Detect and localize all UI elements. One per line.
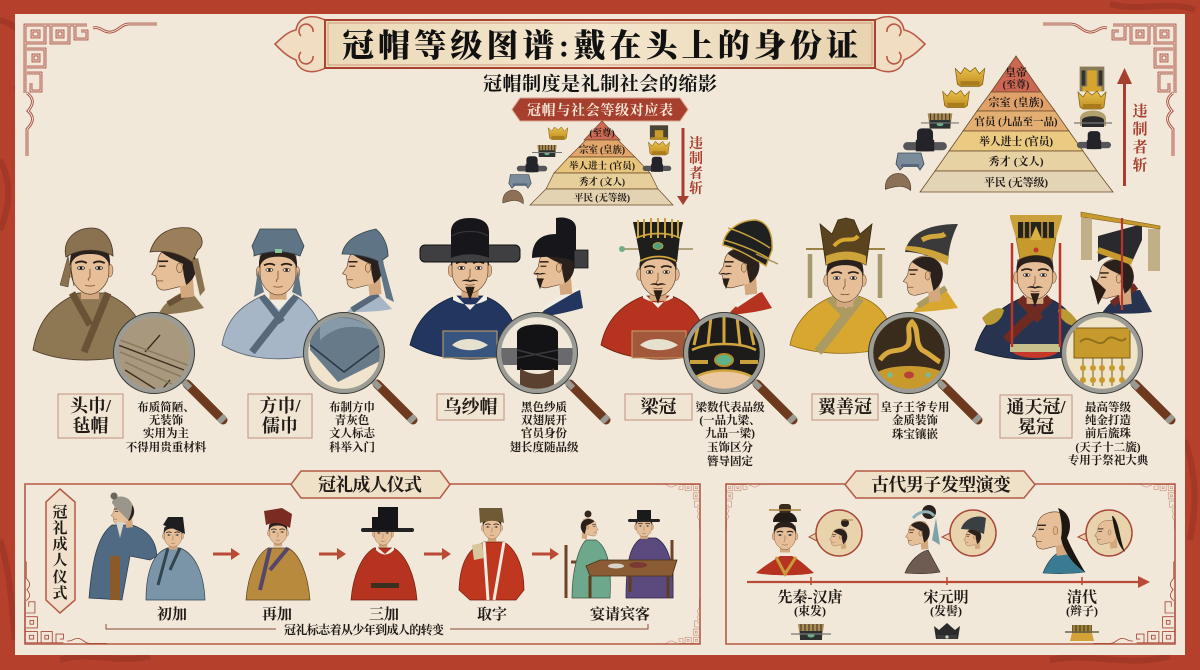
small vertical warning text: 违: [689, 135, 703, 152]
large vertical warning text: 者: [1132, 138, 1148, 156]
figure: liang guan profile: [719, 220, 778, 315]
arrow one: [213, 548, 240, 560]
label: yishan guan: 翼善冠: [818, 397, 872, 417]
description: liang guan: 簪导固定: [707, 454, 753, 468]
magnifier: liang beams detail: [684, 312, 794, 421]
small vertical warning text: [689, 135, 703, 197]
vertical heading: 礼: [52, 520, 68, 537]
panel: capping ceremony: [25, 471, 700, 644]
small pyramid: 秀才 (文人): [579, 176, 625, 188]
description: liang guan: 玉饰区分: [707, 440, 753, 454]
description: yishan guan: 珠宝镶嵌: [892, 427, 938, 441]
large pyramid: 官员 (九品至一品): [974, 115, 1058, 128]
arrow four: [532, 548, 559, 560]
small pyramid: 宗室 (皇族): [579, 144, 625, 156]
bubble: bun: [942, 510, 996, 556]
subtitle: 冠帽制度是礼制社会的缩影: [483, 72, 717, 95]
small pyramid: 平民 (无等级): [574, 192, 630, 204]
large vertical warning text: 制: [1132, 120, 1148, 138]
panel: hairstyle evolution: [726, 471, 1175, 644]
description: yishan guan: 皇子王爷专用: [880, 400, 950, 414]
large arrow: rank upward: [1117, 68, 1132, 186]
step captions: 宴请宾客: [590, 605, 650, 623]
large pyramid: 平民 (无等级): [984, 175, 1048, 189]
panel ornament top right: [1130, 484, 1175, 529]
label: yishan guan: [812, 394, 878, 420]
panel heading: [845, 471, 1035, 498]
magnifier: rough cloth: [114, 312, 224, 421]
ceremony note: 冠礼标志着从少年到成人的转变: [284, 622, 445, 637]
panel ornament bottom right: [1093, 562, 1175, 643]
small vertical warning text: 者: [689, 165, 703, 182]
large pyramid: 秀才 (文人): [988, 154, 1044, 168]
description: tongtian guan: 纯金打造: [1085, 413, 1131, 427]
large vertical warning text: 斩: [1132, 156, 1148, 174]
panel ornament bottom right: [655, 599, 700, 644]
era label: early: (束发): [794, 603, 826, 618]
era label: middle: 宋元明: [923, 589, 969, 606]
step captions: 三加: [369, 606, 399, 623]
figure: official wusha front: [410, 218, 520, 359]
description: wusha cap: 双翅展开: [521, 413, 567, 427]
label: wusha cap: 乌纱帽: [444, 397, 498, 417]
arrow three: [424, 548, 451, 560]
description: tongtian guan: 最高等级: [1085, 400, 1131, 414]
small arrow: violation down: [677, 128, 689, 205]
small vertical warning text: 制: [689, 150, 703, 167]
figure: yishan guan profile: [903, 224, 958, 312]
panel ornament bottom left: [25, 562, 107, 643]
vertical heading: 成: [52, 535, 68, 553]
description: square scarf: 青灰色: [335, 413, 370, 427]
era label: late: 清代: [1067, 588, 1097, 606]
vertical heading: 式: [52, 584, 68, 602]
vertical heading: 仪: [52, 569, 68, 586]
label: square scarf: 方巾/: [259, 396, 301, 416]
small table ribbon: [512, 98, 688, 121]
description: liang guan: 梁数代表品级: [696, 400, 765, 414]
mandarin square: [443, 331, 497, 358]
magnifier: square scarf: [304, 312, 414, 421]
figure: commoner headcloth profile: [150, 228, 205, 315]
bracket line: [106, 624, 648, 629]
description: square scarf: 科举入门: [329, 440, 375, 454]
panel heading: 冠礼成人仪式: [318, 475, 422, 495]
label: square scarf: [248, 394, 312, 438]
banner cloud left: [275, 17, 327, 72]
description: square scarf: 文人标志: [329, 426, 376, 440]
description: headcloth: 实用为主: [143, 426, 189, 440]
large vertical warning text: [1132, 103, 1148, 174]
panel ornament top left: [726, 484, 771, 529]
small pyramid: 举人进士 (官员): [569, 160, 635, 172]
figure: yishan guan front: [790, 218, 892, 353]
hairstyle: queue: [1032, 508, 1085, 574]
step captions: 初加: [157, 606, 187, 623]
large vertical warning text: 违: [1132, 103, 1148, 120]
label: headcloth: [58, 394, 123, 438]
large pyramid: [920, 56, 1113, 192]
large pyramid hats: [885, 67, 1112, 190]
hairstyle: bun side: [905, 505, 940, 574]
title text: 冠帽等级图谱:戴在头上的身份证: [342, 28, 858, 64]
description: yishan guan: [880, 400, 950, 441]
era label: middle: (发髻): [930, 603, 962, 618]
magnifier: gold plate detail: [1062, 312, 1172, 421]
corner ornament: top right: [1043, 24, 1175, 156]
era label: middle: [923, 589, 969, 618]
description: headcloth: 无装饰: [149, 413, 184, 427]
step captions: 取字: [477, 606, 507, 623]
large pyramid: 举人进士 (官员): [979, 134, 1053, 148]
magnifier: wusha detail: [496, 312, 607, 421]
step four: [459, 508, 524, 600]
description: tongtian guan: (天子十二旒): [1075, 440, 1141, 454]
large pyramid: 宗室 (皇族): [988, 95, 1044, 109]
panel heading: [291, 471, 450, 498]
vertical heading: 冠: [52, 504, 68, 521]
description: tongtian guan: 前后旒珠: [1085, 426, 1131, 440]
vertical heading: [46, 489, 75, 613]
small pyramid: [530, 121, 673, 205]
description: liang guan: [696, 400, 765, 468]
title banner: [275, 17, 925, 72]
bubble: queue: [1078, 510, 1132, 556]
label: tongtian guan: [1000, 395, 1072, 438]
figure: scholar square cap profile: [342, 229, 394, 312]
step captions: [157, 605, 650, 623]
step captions: 再加: [262, 606, 292, 623]
description: headcloth: [126, 400, 207, 454]
description: headcloth: 布质简陋、: [137, 400, 195, 414]
bubble: topknot: [809, 510, 862, 556]
panel heading: 古代男子发型演变: [871, 474, 1012, 495]
description: square scarf: 布制方巾: [329, 400, 375, 414]
small table ribbon: 冠帽与社会等级对应表: [527, 102, 673, 119]
figure: emperor tongtian profile: [1081, 212, 1160, 314]
era hat icons: [791, 623, 1099, 641]
hairstyle: topknot front: [756, 504, 814, 575]
label: liang guan: 梁冠: [640, 396, 676, 417]
description: headcloth: 不得用贵重材料: [126, 440, 207, 454]
label: headcloth: 头巾/: [70, 395, 112, 416]
label: headcloth: 毡帽: [72, 416, 108, 436]
description: tongtian guan: [1068, 400, 1150, 467]
era label: late: [1066, 588, 1098, 618]
figure: commoner headcloth front: [33, 228, 142, 360]
description: wusha cap: [510, 400, 579, 454]
small vertical warning text: 斩: [689, 180, 703, 197]
label: wusha cap: [437, 394, 504, 420]
description: wusha cap: 黑色纱质: [521, 400, 567, 414]
large pyramid: 皇帝: [1005, 65, 1027, 79]
description: yishan guan: 金质装饰: [892, 413, 938, 427]
label: tongtian guan: 冕冠: [1018, 417, 1054, 437]
step three: [351, 507, 417, 600]
description: wusha cap: 翅长度随品级: [510, 440, 579, 454]
panel ornament top right: [655, 484, 700, 529]
figure: emperor tongtian front: [975, 215, 1083, 360]
step two: [246, 508, 310, 600]
mandarin square: [632, 331, 686, 358]
figure: scholar square cap front: [222, 229, 325, 359]
step five: banquet: [566, 510, 677, 598]
vertical heading: 人: [52, 553, 68, 569]
small pyramid: (至尊): [589, 127, 615, 139]
description: liang guan: 九品一梁): [705, 426, 755, 440]
description: square scarf: [329, 400, 376, 454]
description: wusha cap: 官员身份: [521, 426, 567, 440]
label: square scarf: 儒巾: [262, 416, 298, 436]
label: tongtian guan: 通天冠/: [1006, 397, 1066, 417]
timeline arrow: [747, 576, 1150, 588]
era label: early: 先秦-汉唐: [778, 588, 842, 606]
era label: late: (辫子): [1066, 603, 1098, 618]
corner ornament: top left: [25, 24, 157, 156]
label: liang guan: [625, 394, 692, 420]
magnifier: gold dragon detail: [868, 312, 979, 421]
banner cloud right: [873, 17, 925, 72]
arrow two: [319, 548, 346, 560]
large pyramid: (至尊): [1003, 78, 1029, 91]
description: liang guan: (一品九梁、: [699, 413, 761, 427]
era label: early: [778, 588, 842, 618]
figure: official wusha profile: [532, 217, 588, 317]
small pyramid hats: [503, 125, 671, 204]
step one: elder capping a youth: [89, 492, 205, 600]
figure: liang guan front: [601, 218, 707, 359]
banner body: [325, 20, 875, 68]
description: tongtian guan: 专用于祭祀大典: [1068, 453, 1150, 467]
